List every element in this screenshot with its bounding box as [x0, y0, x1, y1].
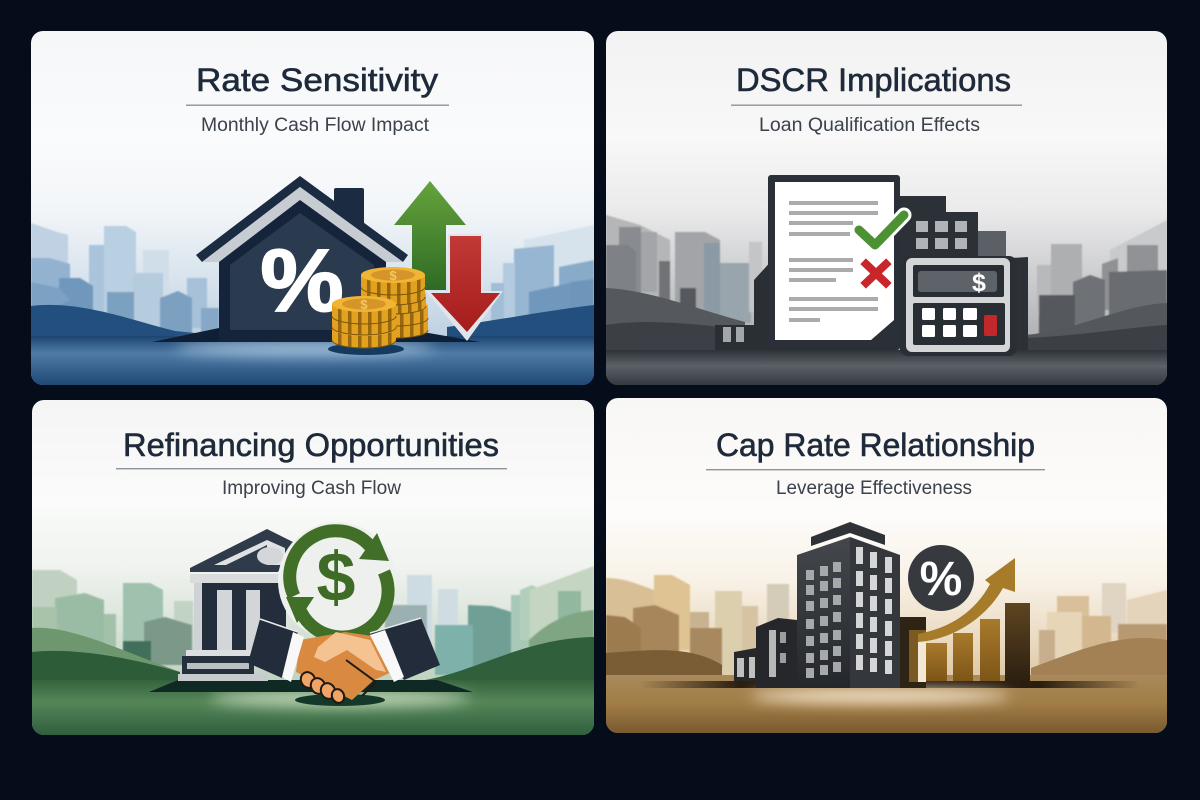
icon: bank building [149, 529, 473, 692]
icon: red X mark [866, 264, 886, 283]
icon: green check mark [859, 215, 904, 245]
chart: rising bars with arrow [900, 558, 1030, 688]
icon: handshake [248, 618, 440, 706]
panel: Cap Rate Relationship [606, 398, 1167, 733]
subtitle: Improving Cash Flow: Improving Cash Flow [222, 478, 401, 499]
icon: checklist document [768, 175, 900, 350]
title: Cap Rate Relationship: Cap Rate Relationship [716, 427, 1035, 463]
icon: percent badge [908, 545, 974, 611]
icon: office buildings [734, 522, 900, 688]
icon: dark building behind document [715, 196, 1028, 350]
icon: house with percent [152, 176, 480, 342]
subtitle: Leverage Effectiveness: Leverage Effectiveness [776, 478, 972, 499]
icon: gold coin stacks [328, 267, 428, 355]
icon: circular refinance dollar [278, 522, 396, 640]
panel: DSCR Implications [606, 31, 1167, 385]
subtitle: Loan Qualification Effects: Loan Qualification Effects [759, 115, 980, 136]
title: Rate Sensitivity: Rate Sensitivity [196, 62, 438, 98]
icon: calculator: $ [972, 269, 986, 297]
icon: red down arrow [426, 234, 503, 341]
title: DSCR Implications: DSCR Implications [736, 62, 1011, 98]
panel: Refinancing Opportunities [32, 400, 594, 735]
icon: gold coin stacks: $ [389, 268, 397, 283]
icon: green up arrow [394, 181, 466, 290]
subtitle: Monthly Cash Flow Impact: Monthly Cash Flow Impact [201, 115, 430, 136]
icon: gold coin stacks: $ [360, 297, 368, 312]
icon: percent badge: % [920, 553, 962, 606]
panel: Rate Sensitivity [31, 31, 594, 385]
icon: calculator [900, 256, 1017, 356]
icon: house with percent: % [260, 231, 344, 330]
title: Refinancing Opportunities: Refinancing Opportunities [123, 427, 499, 463]
icon: circular refinance dollar: $ [317, 538, 355, 616]
